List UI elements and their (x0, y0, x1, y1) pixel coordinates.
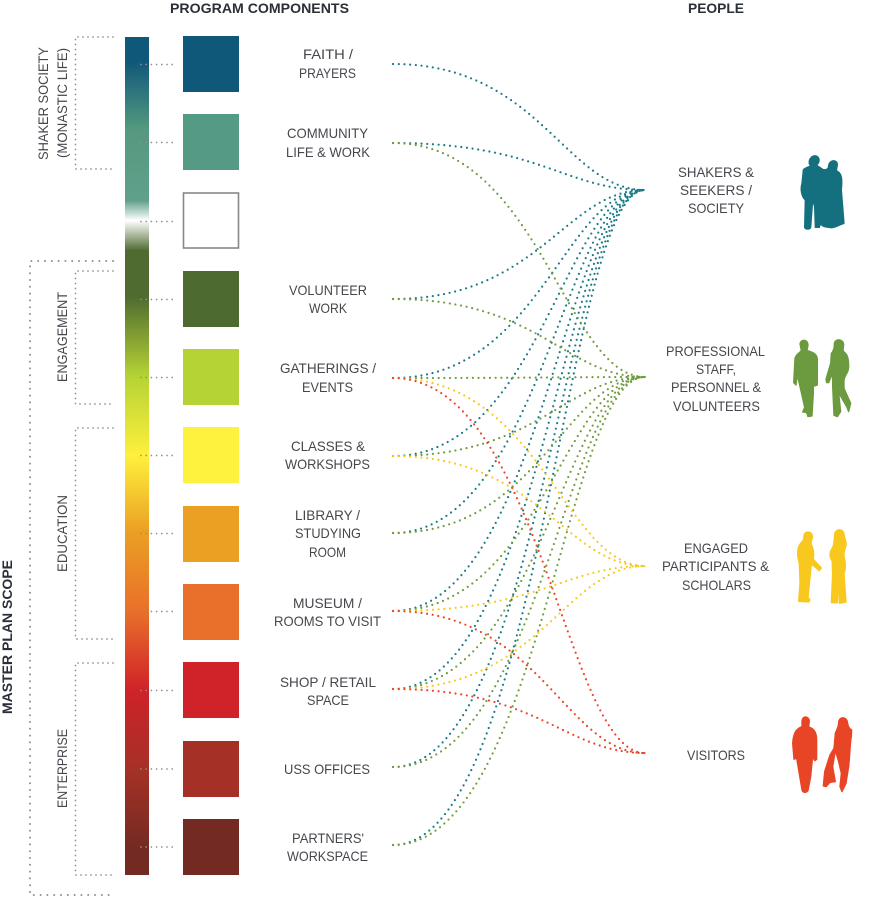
label: classes: CLASSES & (291, 438, 366, 454)
label: faith (299, 46, 356, 81)
label: participants: PARTICIPANTS & (662, 558, 770, 574)
label: community: LIFE & WORK (286, 144, 371, 160)
label: classes (285, 438, 370, 472)
program labels (274, 46, 381, 864)
connections to participants (yellow) (393, 378, 645, 689)
bracket: education (76, 428, 113, 639)
label: faith: PRAYERS (299, 65, 356, 81)
icon: staff pair (794, 340, 851, 417)
swatch: shop (183, 662, 239, 718)
swatch: uss offices (183, 741, 239, 797)
heading: people: PEOPLE (688, 0, 744, 16)
label: shakers: SOCIETY (688, 200, 745, 216)
tick connectors bar to swatches (141, 64, 174, 847)
swatch: classes (183, 427, 239, 483)
label: faith: FAITH / (303, 46, 353, 62)
bracket: enterprise (76, 663, 113, 875)
label: shaker society: (MONASTIC LIFE) (54, 48, 70, 158)
label: enterprise: ENTERPRISE (54, 729, 70, 808)
label: library (295, 507, 361, 560)
label: library: STUDYING (295, 525, 361, 541)
label: volunteer (289, 282, 367, 316)
label: museum: ROOMS TO VISIT (274, 613, 381, 629)
swatch: gatherings (183, 349, 239, 405)
label: community (286, 125, 371, 160)
swatch: partners (183, 819, 239, 875)
connections to shakers (teal) (393, 64, 645, 845)
people labels (662, 164, 770, 763)
label: shakers: SEEKERS / (680, 182, 752, 198)
label: staff: STAFF, (696, 361, 736, 377)
label: shakers: SHAKERS & (678, 164, 755, 180)
label: shaker society: SHAKER SOCIETY (35, 46, 51, 160)
label: partners (287, 830, 368, 864)
label: museum: MUSEUM / (293, 595, 362, 611)
swatch: faith (183, 36, 239, 92)
swatch: empty (184, 193, 238, 248)
label: gatherings: EVENTS (302, 379, 353, 395)
swatch: volunteer (183, 271, 239, 327)
label: volunteer: VOLUNTEER (289, 282, 367, 298)
label: partners: WORKSPACE (287, 848, 368, 864)
label: staff: PROFESSIONAL (666, 343, 765, 359)
bracket: master plan scope (30, 261, 113, 895)
heading: program components: PROGRAM COMPONENTS (170, 0, 349, 16)
label: shop: SPACE (307, 692, 349, 708)
swatch: library (183, 506, 239, 562)
label: library: ROOM (309, 544, 346, 560)
label: staff: VOLUNTEERS (673, 398, 760, 414)
swatch: community (183, 114, 239, 170)
connections to visitors (red) (393, 378, 645, 753)
label: participants: ENGAGED (684, 540, 748, 556)
label: staff (666, 343, 765, 414)
label: volunteer: WORK (309, 300, 348, 316)
label: participants: SCHOLARS (682, 577, 751, 593)
label: gatherings (280, 360, 376, 395)
label: gatherings: GATHERINGS / (280, 360, 376, 376)
label: library: LIBRARY / (295, 507, 360, 523)
label: participants (662, 540, 770, 593)
label: uss offices: USS OFFICES (284, 761, 370, 777)
label: community: COMMUNITY (287, 125, 369, 141)
label: shop (280, 674, 376, 708)
swatch: museum (183, 584, 239, 640)
label: engagement: ENGAGEMENT (54, 292, 70, 382)
icon: shakers couple (801, 156, 844, 229)
label: shop: SHOP / RETAIL (280, 674, 376, 690)
label: visitors: VISITORS (687, 747, 745, 763)
icon: participants pair (798, 530, 846, 603)
bracket: shaker society (76, 37, 113, 169)
connections to staff (green) (393, 143, 645, 845)
label: museum (274, 595, 381, 629)
gradient bar (125, 37, 149, 875)
label: shaker society (35, 46, 70, 160)
colour swatches (183, 36, 239, 875)
label: partners: PARTNERS' (292, 830, 364, 846)
bracket: engagement (76, 271, 113, 404)
label: shakers (678, 164, 755, 216)
label: classes: WORKSHOPS (285, 456, 370, 472)
label: education: EDUCATION (54, 495, 70, 572)
label: staff: PERSONNEL & (671, 379, 762, 395)
icon: visitors pair (793, 717, 852, 792)
